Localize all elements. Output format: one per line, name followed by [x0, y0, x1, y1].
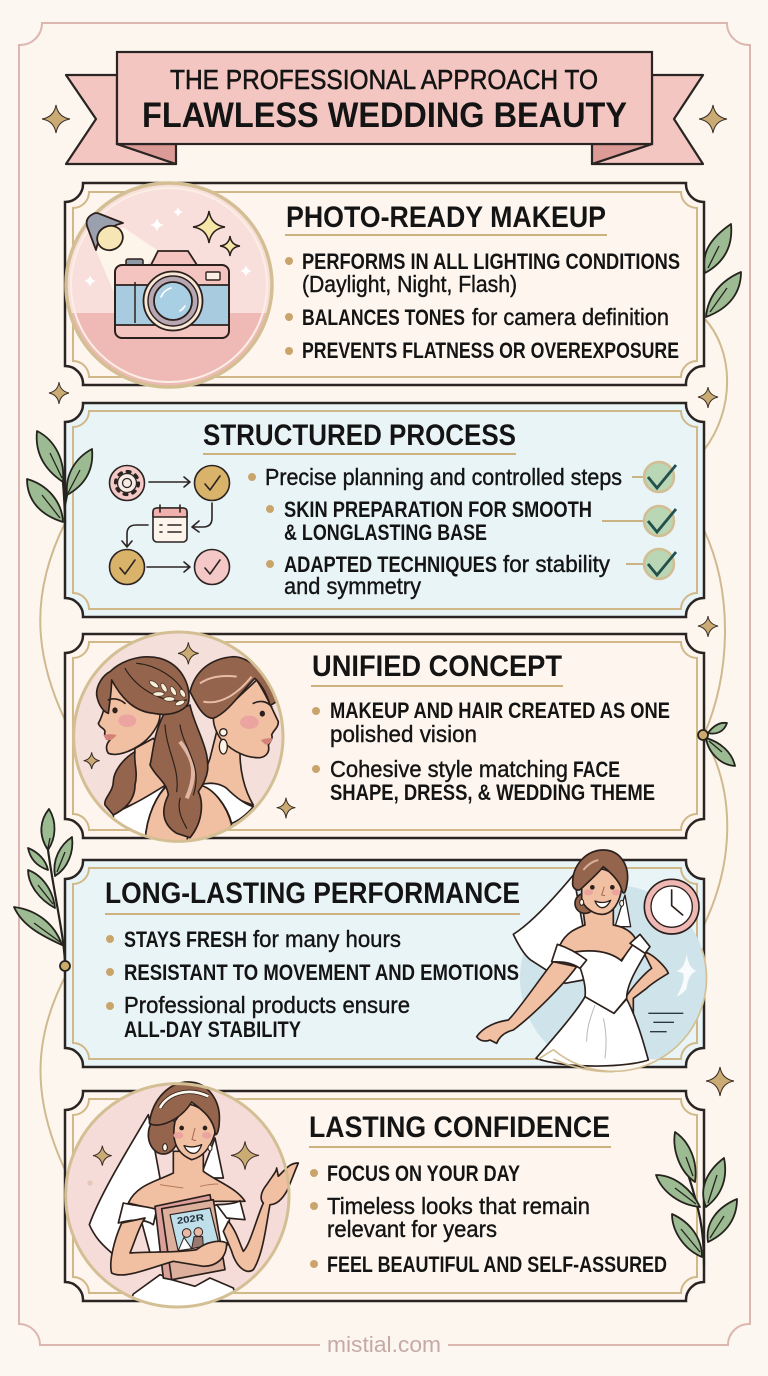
panel 5: lasting confidence: [65, 1082, 737, 1311]
panel 2 border: [65, 403, 704, 617]
panel 3 bullets: Cohesive style matching: [330, 756, 568, 782]
ribbon left tail: [66, 75, 176, 164]
sparkles around page: [42, 105, 734, 1096]
panel 3 bullets: SHAPE, DRESS, & WEDDING THEME: [330, 780, 655, 805]
panel 4 border: [65, 860, 704, 1067]
leaves right of panel 1: [704, 224, 741, 317]
panel 2 bullets: & LONGLASTING BASE: [284, 520, 487, 545]
side node with leaves: [698, 723, 735, 766]
leaves left of panel 2: [27, 431, 92, 524]
footer website: mistial.com: [327, 1332, 441, 1357]
title ribbon: [66, 52, 703, 164]
panel 4 bullets: for many hours: [253, 926, 401, 952]
panel 1 bullets: BALANCES TONES: [302, 305, 465, 330]
check marks column: [602, 462, 676, 579]
connecting gold vines: [40, 317, 727, 1172]
panel 4 bullets: [106, 926, 519, 1042]
panel 1 bullets: for camera definition: [472, 304, 669, 330]
illustration: bride with clock: [477, 850, 723, 1076]
panel 4: long-lasting performance: [65, 850, 723, 1076]
title line 2: FLAWLESS WEDDING BEAUTY: [142, 95, 627, 135]
process flow diagram: [110, 466, 230, 584]
panel 2 heading: STRUCTURED PROCESS: [203, 419, 516, 452]
leaves right of panel 5: [656, 1132, 737, 1265]
ribbon right fold: [592, 144, 652, 164]
panel 1 border: [65, 183, 704, 385]
panel 3 heading: UNIFIED CONCEPT: [312, 650, 562, 683]
panel 5 bullets: FOCUS ON YOUR DAY: [327, 1161, 520, 1186]
title line 1: THE PROFESSIONAL APPROACH TO: [170, 64, 598, 95]
panel 2: structured process: [65, 403, 704, 617]
ribbon right tail: [592, 75, 703, 164]
panel 2 bullets: [248, 464, 622, 599]
icon: camera in circle: [60, 183, 280, 393]
panel 5 heading: LASTING CONFIDENCE: [309, 1111, 610, 1144]
panel 3 bullets: [312, 698, 670, 805]
panel 4 bullets: Professional products ensure: [124, 992, 410, 1018]
panel 1 bullets: (Daylight, Night, Flash): [302, 271, 517, 297]
panel 4 bullets: STAYS FRESH: [124, 927, 247, 952]
panel 4 heading: LONG-LASTING PERFORMANCE: [105, 877, 520, 910]
panel 3: unified concept: [65, 632, 704, 845]
panel 5 bullets: FEEL BEAUTIFUL AND SELF-ASSURED: [327, 1252, 667, 1277]
leaves left of panel 4: [14, 809, 72, 962]
ribbon left fold: [117, 144, 176, 164]
panel 4 bullets: RESISTANT TO MOVEMENT AND EMOTIONS: [124, 960, 519, 985]
panel 2 bullets: Precise planning and controlled steps: [265, 464, 622, 490]
panel 2 bullets: for stability: [503, 551, 610, 577]
illustration: bride holding album: [66, 1082, 298, 1311]
panel 1 bullets: PERFORMS IN ALL LIGHTING CONDITIONS: [302, 249, 680, 274]
panel 1 bullets: PREVENTS FLATNESS OR OVEREXPOSURE: [302, 338, 679, 363]
panel 3 bullets: FACE: [573, 757, 620, 782]
panel 2 bullets: SKIN PREPARATION FOR SMOOTH: [284, 497, 592, 522]
panel 4 bullets: ALL-DAY STABILITY: [124, 1017, 301, 1042]
panel 2 bullets: ADAPTED TECHNIQUES: [284, 552, 497, 577]
ribbon main band: [117, 52, 652, 144]
panel 1 bullets: [285, 249, 680, 363]
panel 1 heading: PHOTO-READY MAKEUP: [286, 201, 606, 234]
illustration: two brides in profile: [74, 632, 295, 845]
panel 5 border: [65, 1091, 704, 1301]
panel 3 bullets: MAKEUP AND HAIR CREATED AS ONE: [330, 698, 670, 723]
panel 2 bullets: and symmetry: [284, 573, 421, 599]
panel 1: photo-ready makeup: [60, 183, 704, 393]
panel 3 bullets: polished vision: [330, 721, 477, 747]
album label: 202R: [176, 1212, 205, 1226]
panel 5 bullets: relevant for years: [327, 1216, 497, 1242]
panel 3 border: [65, 634, 704, 838]
panel 5 bullets: [310, 1161, 667, 1277]
panel 5 bullets: Timeless looks that remain: [327, 1193, 590, 1219]
side node on left vine: [60, 961, 70, 971]
